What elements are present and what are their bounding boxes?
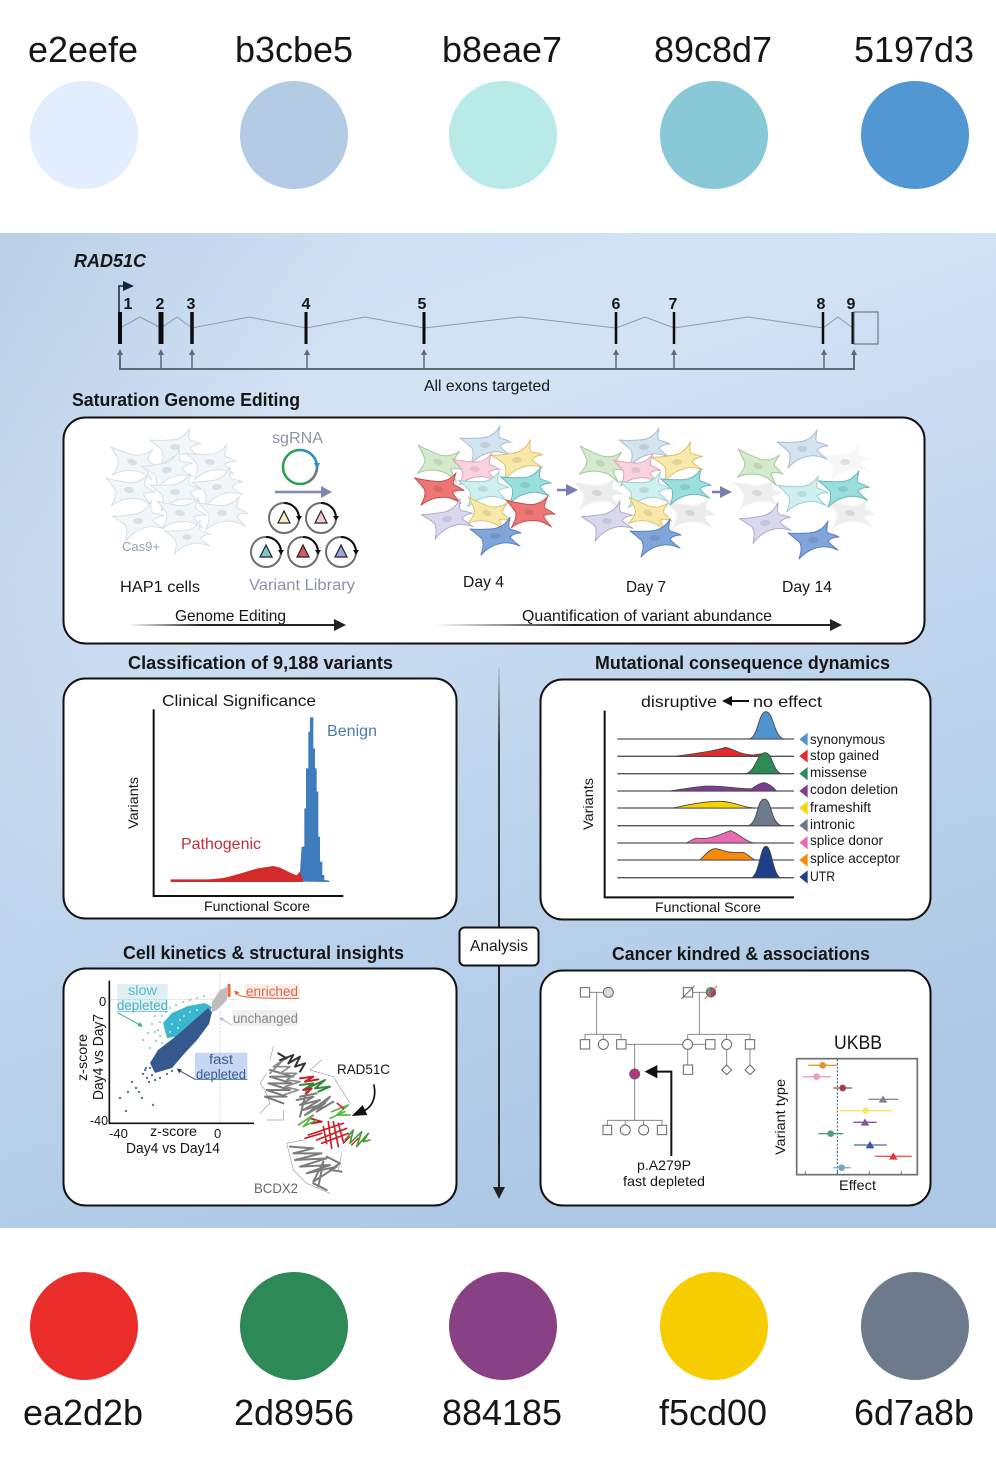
gene model: exons and introns: 6 xyxy=(612,296,621,313)
scatter axes labels: z-score xyxy=(74,1034,90,1081)
y axis label: Variants xyxy=(125,777,141,829)
cells day 4 xyxy=(407,426,558,555)
variant type legend: missense xyxy=(810,764,867,780)
gene model: exons and introns: 2 xyxy=(156,296,165,313)
genome editing arrow xyxy=(128,608,346,631)
ridgeline chart xyxy=(605,711,808,897)
scatter axes labels: -40 xyxy=(90,1113,108,1128)
BCDX2 label: BCDX2 xyxy=(254,1180,298,1196)
pathogenic label: Pathogenic xyxy=(181,836,261,853)
panel: cell kinetics and structure xyxy=(64,968,456,1206)
cells day 7 xyxy=(569,428,719,557)
bottom colour palette: 884185 xyxy=(442,1392,562,1433)
variant type legend: stop gained xyxy=(810,747,879,763)
gene model: exons and introns: 8 xyxy=(817,296,826,313)
transcription start flag xyxy=(119,281,134,312)
x axis label: Functional Score xyxy=(655,899,761,915)
direction header xyxy=(641,694,823,711)
scatter labels: enriched xyxy=(246,984,298,999)
panel: cancer kindred and associations xyxy=(540,970,930,1206)
analysis box xyxy=(460,928,538,966)
chart title: Clinical Significance xyxy=(162,693,316,710)
heading: cell kinetics: Cell kinetics & structural insights xyxy=(123,943,404,963)
top colour palette xyxy=(28,29,974,189)
gene model: exons and introns: 4 xyxy=(302,296,311,313)
variant annotation: fast depleted xyxy=(623,1173,705,1189)
bottom colour palette xyxy=(23,1272,974,1433)
scatter labels xyxy=(117,983,298,1082)
scatter axes labels: z-score xyxy=(150,1123,197,1139)
day labels: Day 4 xyxy=(463,574,504,591)
variant type legend: UTR xyxy=(810,868,835,884)
scatter labels: slow xyxy=(128,983,157,998)
variant type legend: intronic xyxy=(810,816,855,832)
top colour palette: b8eae7 xyxy=(442,29,562,70)
arrow: sgRNA to library xyxy=(275,486,332,498)
proband pointer xyxy=(657,1072,671,1156)
heading: saturation genome editing: Saturation Genome Editing xyxy=(72,390,300,410)
pedigree xyxy=(580,986,755,1156)
forest x label: Effect xyxy=(839,1177,876,1193)
scatter axes labels: Day4 vs Day14 xyxy=(126,1141,220,1157)
top colour palette: 5197d3 xyxy=(854,29,974,70)
blue background panel xyxy=(0,233,996,1228)
HAP1 cell cluster xyxy=(101,428,250,554)
forest plot xyxy=(797,1059,917,1175)
cells day 14 xyxy=(727,430,879,559)
exon targeting arrows xyxy=(117,349,857,369)
top colour palette: 89c8d7 xyxy=(654,29,772,70)
benign label: Benign xyxy=(327,723,377,740)
day labels xyxy=(463,574,832,596)
quantification arrow: Quantification of variant abundance xyxy=(522,608,772,625)
scatter plot points xyxy=(119,984,230,1112)
scatter axes labels: 0 xyxy=(99,994,106,1009)
bottom colour palette: 6d7a8b xyxy=(854,1392,974,1433)
arrow: day 4 to day 7 xyxy=(557,484,578,496)
forest y label: Variant type xyxy=(772,1079,788,1155)
analysis box: Analysis xyxy=(470,938,528,955)
variant type legend: codon deletion xyxy=(810,781,898,797)
scatter axes labels: 0 xyxy=(214,1126,221,1141)
RAD51C pointer xyxy=(362,1085,375,1112)
gene model: exons and introns: 1 xyxy=(124,296,133,313)
variant annotation: p.A279P xyxy=(637,1157,691,1173)
arrow: day 7 to day 14 xyxy=(712,486,732,498)
Cas9 label: Cas9+ xyxy=(122,540,160,554)
protein structure BCDX2 xyxy=(260,1047,375,1193)
direction header: disruptive xyxy=(641,694,717,711)
bottom colour palette: f5cd00 xyxy=(659,1392,767,1433)
day labels: Day 7 xyxy=(626,579,666,596)
gene title: RAD51C xyxy=(74,251,147,271)
panel: classification of variants xyxy=(64,678,456,918)
scatter label backgrounds xyxy=(109,973,300,1123)
gene model: exons and introns: 9 xyxy=(847,296,856,313)
gene model: exons and introns: 5 xyxy=(418,296,427,313)
variant type legend: splice donor xyxy=(810,832,883,848)
panel: saturation genome editing xyxy=(64,418,924,644)
variant annotation xyxy=(623,1157,705,1189)
quantification arrow xyxy=(435,608,842,631)
heading: cancer kindred: Cancer kindred & associations xyxy=(612,944,870,964)
variant type legend: frameshift xyxy=(810,799,871,815)
bottom colour palette: 2d8956 xyxy=(234,1392,354,1433)
scatter labels: depleted xyxy=(196,1067,246,1082)
scatter labels: depleted xyxy=(117,998,168,1013)
y axis label: Variants xyxy=(580,778,596,830)
exon caption: All exons targeted xyxy=(424,378,550,395)
scatter axes labels xyxy=(74,994,221,1157)
analysis flow arrow xyxy=(460,668,538,1199)
direction header: no effect xyxy=(753,694,823,711)
variant type legend xyxy=(810,731,900,884)
scatter axes labels: -40 xyxy=(109,1126,128,1141)
panel: mutational consequence dynamics xyxy=(540,680,930,920)
scatter labels: unchanged xyxy=(233,1011,298,1026)
gene model: exons and introns: 7 xyxy=(669,296,678,313)
scatter axes labels: Day4 vs Day7 xyxy=(91,1014,107,1100)
top colour palette: b3cbe5 xyxy=(235,29,353,70)
histogram xyxy=(154,709,343,896)
scatter labels: fast xyxy=(209,1052,233,1067)
top colour palette: e2eefe xyxy=(28,29,138,70)
day labels: Day 14 xyxy=(782,579,832,596)
heading: mutational consequence: Mutational consequence dynamics xyxy=(595,653,890,673)
x axis label: Functional Score xyxy=(204,898,310,914)
sgRNA label: sgRNA xyxy=(272,430,323,447)
sgRNA plasmid icon xyxy=(283,450,320,484)
variant library label: Variant Library xyxy=(249,577,355,594)
bottom colour palette: ea2d2b xyxy=(23,1392,143,1433)
variant library plasmids xyxy=(251,503,359,567)
gene model: exons and introns: 3 xyxy=(187,296,196,313)
RAD51C label: RAD51C xyxy=(337,1061,390,1077)
genome editing arrow: Genome Editing xyxy=(175,608,286,625)
HAP1 label: HAP1 cells xyxy=(120,579,200,596)
variant type legend: synonymous xyxy=(810,731,885,747)
variant type legend: splice acceptor xyxy=(810,850,900,866)
gene model: exons and introns xyxy=(119,281,878,344)
scatter axes and pointers xyxy=(109,981,299,1123)
UKBB title: UKBB xyxy=(834,1033,882,1054)
heading: classification: Classification of 9,188 variants xyxy=(128,653,393,673)
